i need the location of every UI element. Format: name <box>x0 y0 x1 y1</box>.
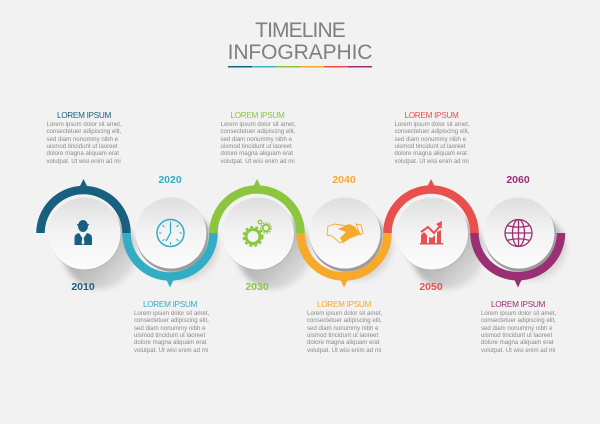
text 2060 <box>481 310 556 354</box>
text 2010 <box>46 121 122 165</box>
icon: growth chart <box>420 221 443 244</box>
text 2030: volutpat. Ut wisi enim ad mi <box>220 158 295 165</box>
icon: globe <box>505 220 532 246</box>
icon: businessman <box>74 220 92 245</box>
text 2060: dolore magna aliquam erat <box>481 339 554 346</box>
title <box>228 19 372 64</box>
disc 3 <box>222 198 294 270</box>
text 2050: uismod tincidunt ut laoreet <box>394 143 466 150</box>
disc 6 <box>484 198 556 272</box>
text 2020: sed diam nonummy nibh e <box>134 325 205 332</box>
heading 2050: LOREM IPSUM <box>404 111 459 120</box>
arc 2020 <box>126 233 214 288</box>
text 2030: sed diam nonummy nibh e <box>220 136 292 143</box>
text 2010: Lorem ipsum dolor sit amet, <box>46 121 122 128</box>
text 2020: uismod tincidunt ut laoreet <box>134 332 205 339</box>
arc 2040 <box>300 233 388 288</box>
text 2030: Lorem ipsum dolor sit amet, <box>220 121 296 128</box>
text 2020: consectetuer adipiscing elit, <box>134 317 209 324</box>
text 2040 <box>307 310 382 354</box>
text 2060: sed diam nonummy nibh e <box>481 325 552 332</box>
text 2010: uismod tincidunt ut laoreet <box>46 143 118 150</box>
text 2040: uismod tincidunt ut laoreet <box>307 332 378 339</box>
arc 2050 <box>388 179 474 233</box>
text 2040: dolore magna aliquam erat <box>307 339 380 346</box>
text 2060: consectetuer adipiscing elit, <box>481 317 556 324</box>
heading 2020: LOREM IPSUM <box>143 300 197 308</box>
heading 2030: LOREM IPSUM <box>230 111 285 120</box>
heading 2010: LOREM IPSUM <box>57 111 111 120</box>
text 2030: consectetuer adipiscing elit, <box>220 128 295 135</box>
title: INFOGRAPHIC <box>228 40 372 64</box>
disc 1 <box>48 198 121 270</box>
text 2010: sed diam nonummy nibh e <box>46 136 118 143</box>
text 2050: Lorem ipsum dolor sit amet, <box>394 121 470 128</box>
icon: clock <box>157 220 184 246</box>
title underline <box>228 66 372 68</box>
heading 2040: LOREM IPSUM <box>317 300 371 308</box>
arc 2030 <box>214 179 300 233</box>
text 2050: sed diam nonummy nibh e <box>394 136 466 143</box>
text 2040: consectetuer adipiscing elit, <box>307 317 382 324</box>
text 2030: dolore magna aliquam erat <box>220 150 293 157</box>
text 2040: volutpat. Ut wisi enim ad mi <box>307 347 381 354</box>
title: TIMELINE <box>255 19 345 42</box>
text 2030 <box>220 121 296 165</box>
disc 2 <box>136 198 208 272</box>
disc 5 <box>396 198 468 270</box>
disc 4 <box>310 198 382 272</box>
arc 2010 <box>40 179 126 233</box>
text 2010: volutpat. Ut wisi enim ad mi <box>46 158 121 165</box>
text 2020: Lorem ipsum dolor sit amet, <box>134 310 209 317</box>
text 2050 <box>394 121 470 165</box>
icon: handshake <box>327 224 363 243</box>
year 2010: 2010 <box>71 281 95 293</box>
text 2060: volutpat. Ut wisi enim ad mi <box>481 347 555 354</box>
heading 2060: LOREM IPSUM <box>491 300 545 308</box>
year 2040: 2040 <box>332 174 356 186</box>
text 2010: consectetuer adipiscing elit, <box>46 128 121 135</box>
text 2040: sed diam nonummy nibh e <box>307 325 378 332</box>
text 2050: dolore magna aliquam erat <box>394 150 467 157</box>
arc 2060 <box>474 233 561 288</box>
text 2020: dolore magna aliquam erat <box>134 339 206 346</box>
text 2020: volutpat. Ut wisi enim ad mi <box>134 347 208 354</box>
year 2030: 2030 <box>245 281 269 293</box>
text 2020 <box>134 310 209 354</box>
year 2020: 2020 <box>158 174 182 186</box>
text 2060: uismod tincidunt ut laoreet <box>481 332 552 339</box>
text 2040: Lorem ipsum dolor sit amet, <box>307 310 382 317</box>
arc shadows <box>63 215 566 289</box>
year 2050: 2050 <box>419 281 443 293</box>
text 2060: Lorem ipsum dolor sit amet, <box>481 310 556 317</box>
text 2030: uismod tincidunt ut laoreet <box>220 143 292 150</box>
year 2060: 2060 <box>506 174 530 186</box>
text 2050: volutpat. Ut wisi enim ad mi <box>394 158 469 165</box>
text 2050: consectetuer adipiscing elit, <box>394 128 469 135</box>
text 2010: dolore magna aliquam erat <box>46 150 119 157</box>
icon: gears <box>244 220 271 246</box>
